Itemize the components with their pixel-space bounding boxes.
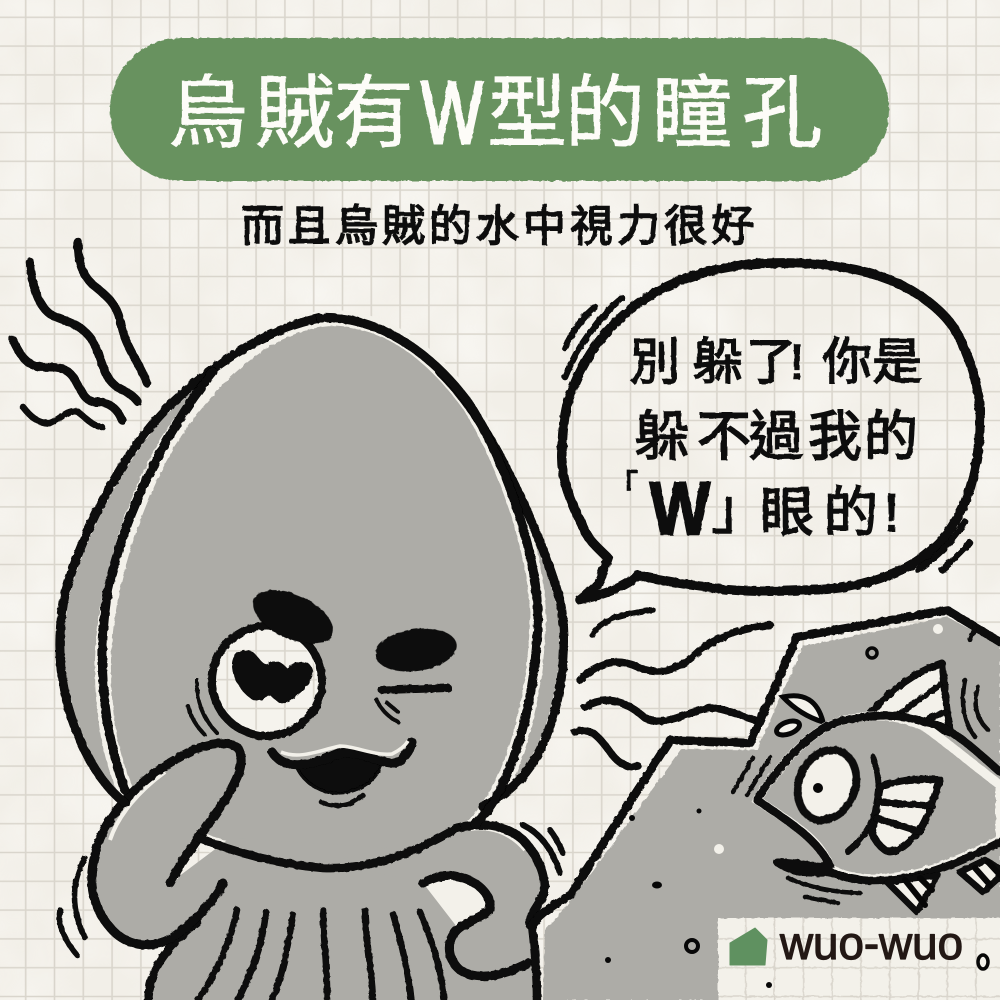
pectoral fin <box>872 779 940 852</box>
fish motion lines <box>733 757 860 903</box>
bubble outline <box>562 263 980 600</box>
bottom fins <box>887 860 1000 912</box>
bubble text: 「 <box>608 470 638 503</box>
subtitle: 而且烏賊的水中視力很好 <box>241 203 758 251</box>
rock speckles <box>605 624 943 963</box>
motion lines beside left arm <box>59 858 85 955</box>
eye monocle <box>212 626 322 736</box>
rock <box>532 610 1000 1000</box>
title pill background <box>110 38 889 181</box>
right arm <box>330 825 563 978</box>
speech bubble <box>562 263 980 600</box>
bubble text: 別躲了!你是 <box>630 334 922 390</box>
motion lines near eye <box>188 680 217 735</box>
moustache and mouth <box>272 741 412 806</box>
rock creases <box>963 628 988 737</box>
fish body <box>757 716 1000 879</box>
gill line <box>848 757 879 852</box>
W-shaped pupil <box>232 650 313 703</box>
rock fill <box>543 617 1000 1000</box>
hand gap <box>423 875 490 927</box>
squid fins <box>60 318 564 807</box>
bubble text: W <box>650 467 710 550</box>
title text: 烏賊有 <box>168 69 414 158</box>
squid head <box>103 318 538 868</box>
title banner <box>110 38 889 181</box>
title text: 型的瞳孔 <box>487 69 822 158</box>
sweat drops <box>775 696 823 738</box>
tentacles <box>148 838 537 1000</box>
bubble text <box>608 334 922 550</box>
bubble text: 」 <box>712 480 766 540</box>
bubble emphasis marks <box>565 298 970 570</box>
title text: W <box>421 63 483 162</box>
rock outline <box>532 610 1000 1000</box>
logo block <box>718 917 1000 1000</box>
right eyebrow and closed eye <box>372 623 460 722</box>
chin line <box>197 828 457 868</box>
left arm and hand <box>92 743 241 945</box>
bubble text: 眼的! <box>760 483 899 543</box>
brand name: wuo-wuo <box>779 917 963 969</box>
logo paper <box>718 918 1000 1000</box>
motion lines: top left waves <box>13 242 147 427</box>
logo speckles <box>766 955 988 988</box>
fish outline <box>757 716 1000 881</box>
bubble text: 躲不過我的 <box>635 407 918 467</box>
top fin <box>867 663 950 733</box>
left eyebrow <box>245 579 341 655</box>
fish eye <box>788 741 866 829</box>
fish <box>733 663 1000 912</box>
title text <box>168 63 822 162</box>
squid character <box>59 318 564 1000</box>
icon: house <box>730 928 767 965</box>
head and fin outlines <box>60 318 564 825</box>
wavy motion lines by rock <box>575 610 770 767</box>
